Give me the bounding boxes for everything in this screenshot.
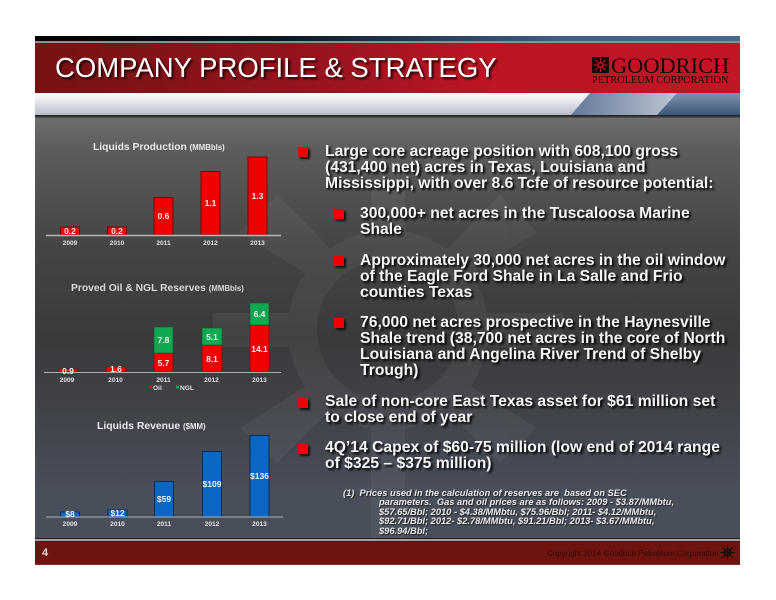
value labels: 14.1 — [251, 344, 268, 354]
header top stripe — [35, 36, 740, 43]
bars — [60, 157, 267, 235]
text block: key bullets: (431,400 net) acres in Texas, Louisiana and — [325, 159, 646, 176]
value labels: 0.9 — [62, 366, 74, 376]
copyright: Copyright 2014 Goodrich Petroleum Corporation — [547, 549, 719, 558]
company logo — [592, 53, 729, 86]
year labels: 2012 — [203, 240, 218, 247]
footnote: (1) Prices used in the calculation of reserves are based on SEC — [343, 488, 627, 498]
year labels: 2010 — [108, 377, 123, 384]
year labels: 2009 — [63, 240, 78, 247]
value labels: 1.6 — [110, 364, 122, 374]
value labels: 0.2 — [111, 226, 123, 236]
value labels: $59 — [157, 494, 171, 504]
text block: key bullets: 76,000 net acres prospective in the Haynesville — [360, 314, 711, 331]
company logo: PETROLEUM CORPORATION — [592, 75, 728, 86]
value labels: $12 — [110, 508, 125, 518]
footer divider — [35, 538, 740, 542]
text block: key bullets — [298, 143, 728, 474]
year labels: 2011 — [156, 377, 171, 384]
page number: 4 — [42, 547, 48, 559]
footnote: $96.94/Bbl; — [379, 526, 428, 536]
year labels: 2011 — [156, 240, 171, 247]
value labels — [65, 471, 269, 519]
text block: key bullets: to close end of year — [325, 409, 472, 426]
header red banner — [35, 43, 740, 93]
year labels: 2009 — [60, 377, 75, 384]
text block: key bullets: Sale of non-core East Texas asset for $61 million set — [325, 393, 715, 410]
value labels: 0.2 — [64, 226, 76, 236]
value labels: $8 — [65, 509, 75, 519]
chart: liquids revenue — [46, 421, 283, 528]
text block: key bullets: Mississippi, with over 8.6 Tcfe of resource potential: — [325, 175, 714, 192]
year labels: 2012 — [205, 521, 220, 528]
value labels — [62, 309, 268, 376]
NGL bars — [154, 303, 269, 353]
value labels: 1.3 — [252, 191, 264, 201]
text block: key bullets: Approximately 30,000 net acres in the oil window — [360, 252, 725, 269]
chart title: Proved Oil & NGL Reserves (MMBbls) — [71, 283, 244, 294]
text block: key bullets: Shale — [360, 221, 402, 238]
bullet markers — [298, 147, 347, 458]
text block: key bullets: counties Texas — [360, 284, 472, 301]
legend: Oil — [153, 385, 162, 392]
year labels: 2013 — [252, 521, 267, 528]
chart: proved oil and NGL reserves — [44, 283, 281, 392]
value labels: 7.8 — [158, 335, 170, 345]
footnote — [343, 488, 674, 537]
background watermark: sun logo — [213, 267, 563, 438]
footnote: $92.71/Bbl; 2012- $2.78/MMbtu, $91.21/Bbl; 2013- $3.67/MMbtu, — [379, 516, 654, 526]
legend: NGL — [180, 385, 194, 392]
text block: key bullets: Louisiana and Angelina River Trend of Shelby — [360, 346, 701, 363]
text block: key bullets: 300,000+ net acres in the Tuscaloosa Marine — [360, 205, 690, 222]
lines: Large core acreage position with 608,100 gross — [325, 143, 678, 160]
year labels: 2010 — [110, 521, 125, 528]
text block: key bullets: 4Q’14 Capex of $60-75 million (low end of 2014 range — [325, 439, 720, 456]
header bottom shadow line — [35, 115, 740, 118]
value labels: 6.4 — [254, 309, 266, 319]
year labels — [63, 521, 267, 528]
title: COMPANY PROFILE & STRATEGY — [55, 52, 497, 83]
year labels: 2011 — [157, 521, 171, 528]
axis — [46, 234, 281, 236]
text block: key bullets: Trough) — [360, 362, 418, 379]
chart: liquids production — [46, 142, 281, 247]
axis — [44, 372, 281, 374]
year labels: 2009 — [63, 521, 78, 528]
value labels — [64, 191, 264, 236]
footer bar — [35, 542, 740, 565]
chart title: Liquids Production (MMBbls) — [93, 142, 225, 153]
year labels: 2012 — [204, 377, 219, 384]
chart title: Liquids Revenue ($MM) — [97, 421, 206, 432]
legend — [149, 385, 194, 392]
bars — [60, 436, 269, 517]
axis — [46, 516, 283, 518]
footnote: parameters. Gas and oil prices are as follows: 2009 - $3.87/MMbtu, — [379, 497, 674, 507]
oil bars — [58, 325, 269, 372]
text block: key bullets: of the Eagle Ford Shale in La Salle and Frio — [360, 268, 683, 285]
company logo: GOODRICH — [611, 53, 729, 78]
text block: key bullets: Shale trend (38,700 net acres in the core of North — [360, 330, 725, 347]
year labels — [60, 377, 267, 384]
text block: key bullets: of $325 – $375 million) — [325, 455, 492, 472]
value labels: 0.6 — [158, 211, 170, 221]
icon: sun square — [592, 57, 609, 73]
year labels: 2013 — [252, 377, 267, 384]
year labels: 2010 — [110, 240, 125, 247]
value labels: 5.1 — [206, 332, 218, 342]
value labels: $136 — [250, 471, 269, 481]
year labels — [63, 240, 265, 247]
value labels: $109 — [203, 479, 222, 489]
footnote: $57.65/Bbl; 2010 - $4.38/MMbtu, $75.96/Bbl; 2011- $4.12/MMbtu, — [379, 507, 656, 517]
value labels: 5.7 — [158, 358, 170, 368]
header white ribbon — [35, 93, 740, 115]
value labels: 1.1 — [205, 198, 217, 208]
value labels: 8.1 — [206, 354, 218, 364]
icon: sun — [720, 545, 735, 560]
slide background panel — [35, 117, 740, 542]
year labels: 2013 — [250, 240, 265, 247]
